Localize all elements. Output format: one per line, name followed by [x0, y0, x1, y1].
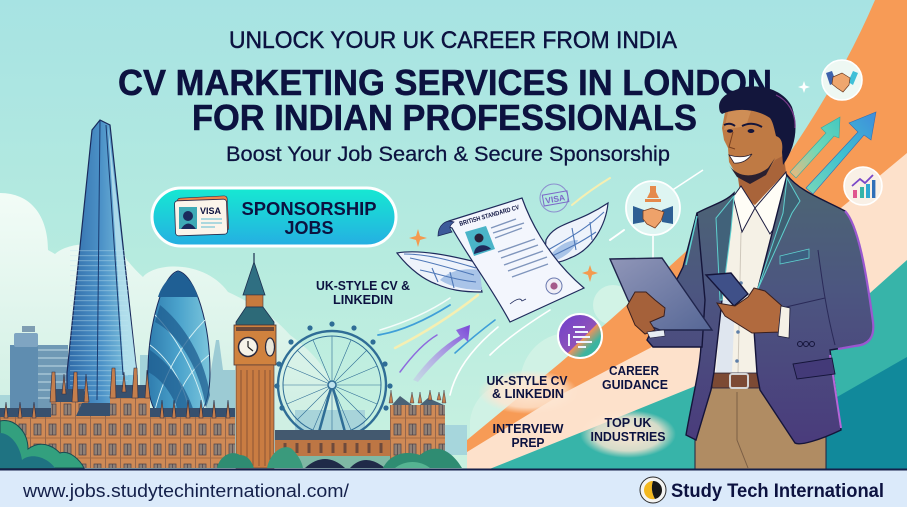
- The Shard: [67, 120, 137, 410]
- right wing: [544, 203, 608, 263]
- labels: services: [478, 364, 676, 458]
- hair: [719, 86, 795, 165]
- trees: [0, 421, 462, 468]
- diagonal colour bands: [467, 0, 907, 470]
- icon: visa stamp: [540, 184, 569, 212]
- icon: chart circle: [844, 167, 882, 205]
- arrows: growth: [790, 112, 876, 194]
- distant buildings: [0, 326, 467, 455]
- jacket right panel: [754, 175, 873, 444]
- The Gherkin: [148, 271, 210, 415]
- neck: [738, 150, 786, 205]
- icon: logo: [640, 477, 666, 503]
- title: FOR INDIAN PROFESSIONALS: [192, 97, 697, 138]
- phone hand: [717, 288, 782, 333]
- jacket left panel: [686, 193, 734, 440]
- labels: services: CAREER: [609, 364, 659, 378]
- footer bar: [0, 468, 907, 507]
- icon: visa card: VISA: [200, 206, 222, 216]
- labels: services: GUIDANCE: [602, 378, 668, 392]
- labels: services: UK-STYLE CV: [486, 374, 568, 388]
- labels: services: PREP: [512, 436, 544, 450]
- icon: career badge: [558, 314, 602, 358]
- labels: services: & LINKEDIN: [492, 387, 564, 401]
- brand name: Study Tech International: [671, 481, 884, 502]
- pill: sponsorship jobs: JOBS: [284, 217, 334, 238]
- icon: stamp and handshake: [626, 170, 703, 260]
- icon: visa stamp: VISA: [545, 192, 566, 206]
- London Eye: [274, 321, 393, 439]
- pill: sponsorship jobs: SPONSORSHIP: [242, 198, 376, 219]
- sparkles: [409, 81, 810, 282]
- pill: sponsorship jobs: [152, 188, 396, 246]
- Big Ben: [234, 253, 276, 468]
- label: UK-style CV and LinkedIn (left): LINKEDIN: [333, 293, 393, 307]
- Houses of Parliament: [0, 368, 446, 468]
- title: [118, 27, 772, 166]
- left wing: [397, 252, 482, 292]
- website url: www.jobs.studytechinternational.com/: [22, 481, 349, 501]
- labels: services: TOP UK: [604, 416, 652, 430]
- title: UNLOCK YOUR UK CAREER FROM INDIA: [229, 27, 677, 54]
- icon: winged CV document: [397, 184, 608, 322]
- swoosh streaks: [378, 178, 624, 395]
- labels: services: INDUSTRIES: [590, 430, 666, 444]
- paper: [440, 198, 584, 322]
- arrow: purple upward swoosh: [413, 325, 470, 382]
- left arm: [647, 213, 705, 347]
- phone: [706, 273, 748, 306]
- trousers: [695, 385, 826, 470]
- icon: handshake circle: [822, 60, 862, 100]
- shirt: [714, 172, 792, 376]
- tablet: [610, 258, 712, 330]
- head: [722, 106, 790, 183]
- title: CV MARKETING SERVICES IN LONDON: [118, 62, 772, 103]
- label: UK-style CV and LinkedIn (left): [316, 279, 410, 307]
- icon: winged CV document: BRITISH STANDARD CV: [459, 204, 521, 228]
- man with tablet and phone: [610, 86, 873, 470]
- sleeve and trim: [838, 211, 873, 349]
- label: UK-style CV and LinkedIn (left): UK-STYLE CV &: [316, 279, 410, 293]
- belt: [712, 373, 761, 388]
- labels: services: INTERVIEW: [492, 422, 564, 436]
- title: Boost Your Job Search & Secure Sponsorship: [226, 143, 670, 166]
- icon: visa card: [174, 196, 229, 236]
- tablet hand: [627, 292, 665, 334]
